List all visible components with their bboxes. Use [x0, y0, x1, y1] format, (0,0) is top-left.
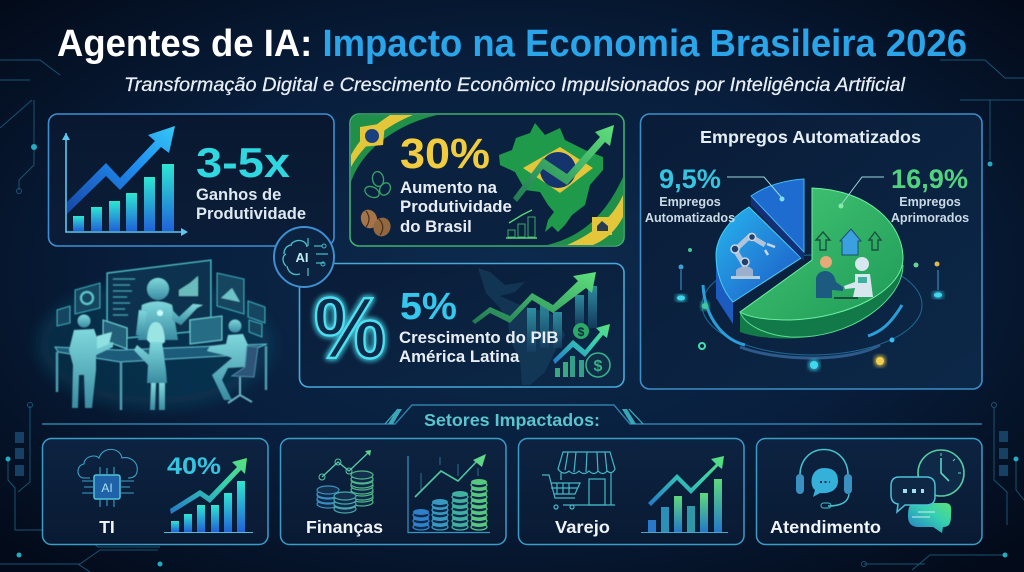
label: aumento na produtividade do brasil: do Brasil [400, 217, 472, 236]
sector name: financas: Finanças [306, 517, 383, 537]
icon: coins [317, 450, 373, 513]
label: empregos aprimorados: Empregos [899, 195, 961, 209]
side screens [57, 273, 265, 349]
icon: dollar and chart: $ [578, 325, 585, 339]
card: financas [280, 438, 506, 544]
icon: mini chart [506, 210, 537, 238]
chip label: AI [101, 481, 113, 495]
card: atendimento [756, 438, 982, 544]
label: empregos aprimorados: Aprimorados [891, 211, 969, 225]
stat: 40%: 40% [167, 453, 221, 480]
icon: person and robot [816, 229, 881, 298]
label: empregos automatizados: Empregos [659, 195, 721, 209]
chart: varejo growth [641, 456, 728, 532]
chair [228, 346, 258, 403]
panel: pib america latina [300, 264, 624, 387]
title: Agentes de IA: Impacto na Economia Brasileira 2026 [57, 23, 967, 65]
main screen [107, 260, 211, 340]
flag ribbon corners [351, 115, 623, 245]
icon: cloud chip [78, 449, 137, 507]
label: empregos automatizados: Automatizados [645, 211, 735, 225]
slice: automated lower [716, 207, 801, 324]
illustration: team with robot [35, 260, 275, 410]
icon: brazil flag [360, 123, 385, 147]
label: aumento na produtividade do brasil: Aumento na [400, 178, 498, 197]
stat: 16,9%: 16,9% [891, 164, 968, 194]
pie chart [716, 177, 903, 339]
label: crescimento do pib america latina: Crescimento do PIB [399, 328, 558, 347]
circuit decoration left [0, 100, 162, 572]
sector name: atendimento: Atendimento [770, 517, 881, 537]
stat: 9,5%: 9,5% [659, 164, 721, 194]
icon: coffee beans [358, 207, 393, 239]
icon: dollar and chart: $ [594, 358, 603, 375]
leader lines [727, 177, 884, 205]
stat: 5%: 5% [400, 286, 457, 328]
map: latin america [478, 268, 565, 385]
label: ganhos de produtividade: Ganhos de [196, 186, 281, 204]
icon: shop and cart [542, 452, 615, 509]
subtitle: Transformação Digital e Crescimento Econômico Impulsionados por Inteligência Artificial [124, 74, 906, 96]
section header: setores impactados: Setores Impactados: [424, 410, 600, 430]
stat: 30%: 30% [400, 130, 490, 178]
icon: coffee leaves [363, 171, 393, 200]
badge: ai brain [274, 227, 334, 287]
label: crescimento do pib america latina: América Latina [399, 347, 520, 366]
label: aumento na produtividade do brasil: Produtividade [400, 197, 512, 216]
person woman [134, 322, 167, 410]
icon: headset [796, 450, 852, 508]
robot [136, 278, 203, 340]
badge: ai brain: AI [296, 250, 308, 265]
panel: aumento brasil [350, 114, 624, 246]
icon: dollar and chart [553, 323, 610, 377]
heading: Empregos Automatizados [700, 127, 921, 147]
icon: seal [592, 217, 612, 235]
map: brazil [499, 123, 614, 232]
slice: automated upper [751, 179, 804, 261]
icon: big percent: % [314, 281, 386, 377]
table [55, 344, 267, 410]
panel: empregos automatizados [640, 114, 982, 389]
section header: setores impactados [42, 405, 982, 430]
panel: ganhos de produtividade [48, 114, 334, 246]
chart: TI growth [164, 458, 253, 532]
slice: enhanced jobs [740, 188, 903, 339]
orbit rings [677, 248, 942, 369]
chart: productivity bars and arrow [62, 126, 188, 236]
icon: robot arm [731, 234, 775, 279]
chart: growth bars [527, 286, 597, 352]
arrow: green growth [472, 272, 596, 324]
icon: clock and chat [891, 450, 964, 533]
card: varejo [518, 438, 744, 544]
stat: 3-5x: 3-5x [196, 139, 291, 186]
person right [207, 320, 248, 400]
label: ganhos de produtividade: Produtividade [196, 205, 306, 223]
chart: coin stacks [408, 454, 490, 532]
card: TI [42, 438, 268, 544]
sector name: varejo: Varejo [555, 517, 610, 537]
sector name: TI: TI [99, 517, 115, 537]
person left [69, 314, 113, 408]
